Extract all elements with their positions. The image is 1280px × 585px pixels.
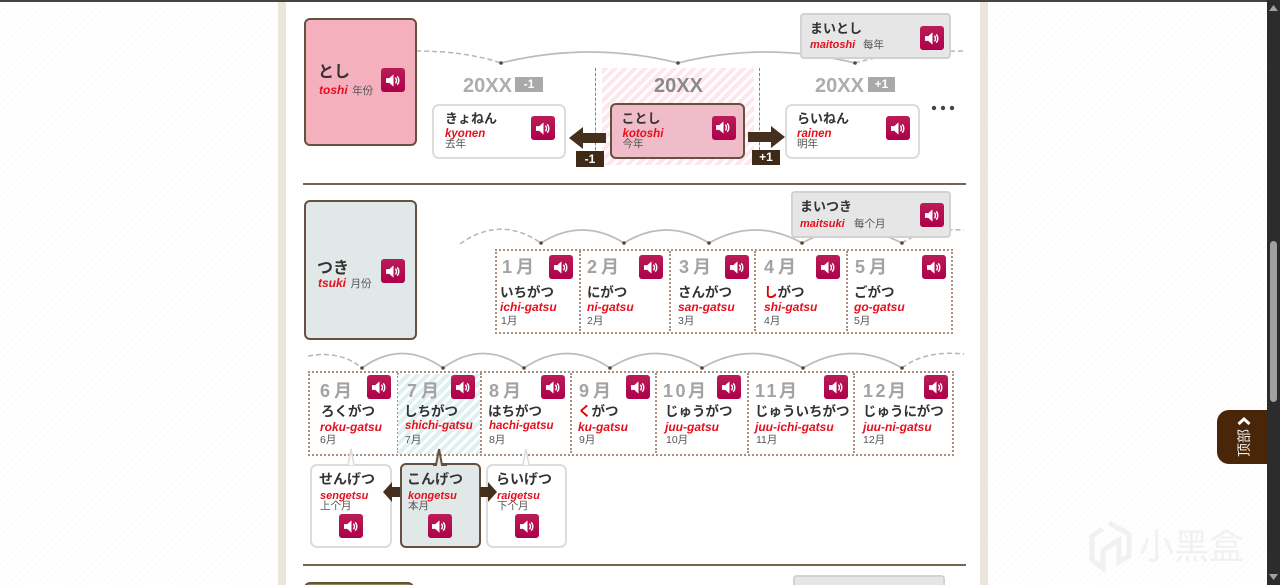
card: kongetsu with pointer: 本月 <box>408 500 429 512</box>
pointer: kongetsu to July <box>433 448 447 466</box>
month: October: じゅうがつ <box>665 404 732 419</box>
card: sengetsu with pointer: せんげつ <box>319 471 375 487</box>
icon: speaker <box>381 259 405 283</box>
month: May: 5月 <box>854 315 870 327</box>
scrollbar thumb <box>1270 241 1277 402</box>
month: February <box>587 255 663 327</box>
month: November <box>754 375 850 446</box>
month: October: juu-gatsu <box>665 420 719 434</box>
callout: maitsuki: 每个月 <box>854 218 886 230</box>
card: rainen: rainen <box>797 128 832 140</box>
connector curves: year and month timelines <box>308 50 964 370</box>
month: September <box>578 375 650 446</box>
card: rainen: 明年 <box>797 138 818 150</box>
card: sengetsu with pointer: 上个月 <box>320 500 352 512</box>
month: December: juu-ni-gatsu <box>863 420 932 434</box>
month: April <box>764 255 840 327</box>
tsuki romaji and meaning: tsuki 月份 <box>318 276 371 290</box>
month: January <box>500 255 573 327</box>
month: July, current highlight: しちがつ <box>404 404 458 419</box>
month: March: san-gatsu <box>678 300 735 314</box>
month: February: ni-gatsu <box>587 300 634 314</box>
pointer: sengetsu to June <box>348 448 354 465</box>
month: January: ichi-gatsu <box>500 300 557 314</box>
card: kongetsu with pointer: こんげつ <box>407 471 463 487</box>
month: November: じゅういちがつ <box>755 404 850 419</box>
month: April: しがつ <box>764 285 804 300</box>
month: May: ごがつ <box>854 285 894 300</box>
month grid: January to May <box>495 249 953 334</box>
month: May: go-gatsu <box>854 300 905 314</box>
minus one tag <box>515 77 543 92</box>
month: December: 12月 <box>863 434 885 446</box>
month: July, current highlight: 7月 <box>405 434 421 446</box>
card: raigetsu with pointer: らいげつ <box>496 471 552 487</box>
month: September: くがつ <box>578 404 618 419</box>
callout: maitsuki: まいつき <box>800 199 852 214</box>
month: June: roku-gatsu <box>320 420 382 434</box>
card: kyonen: きょねん <box>445 111 497 126</box>
icon: watermark logo <box>1090 521 1132 572</box>
month: May <box>854 255 946 327</box>
callout: maitsuki: maitsuki <box>800 218 845 230</box>
tag: minus one: -1 <box>585 152 595 166</box>
card: sengetsu with pointer <box>310 464 392 548</box>
arrow: to last year <box>569 127 606 149</box>
toshi romaji and meaning: toshi 年份 <box>319 83 373 97</box>
back to top label: 顶部 <box>1234 429 1254 457</box>
this-year striped highlight <box>595 68 760 165</box>
scroll down arrow <box>1269 574 1278 580</box>
month: September: ku-gatsu <box>578 420 628 434</box>
next section card top edge <box>304 582 414 585</box>
pointer: raigetsu to August <box>522 448 530 465</box>
watermark <box>1090 519 1244 572</box>
card: kyonen <box>432 104 566 159</box>
toshi heading: とし <box>318 64 350 81</box>
month: September: 9月 <box>579 434 595 446</box>
card: raigetsu with pointer: 下个月 <box>497 500 528 512</box>
card: rainen <box>785 104 920 159</box>
month: July, current highlight: 7月 <box>407 381 443 401</box>
card: kongetsu with pointer <box>400 463 481 548</box>
month: March: 3月 <box>679 257 715 277</box>
month: September: 9月 <box>579 381 615 401</box>
page column frame <box>278 2 988 585</box>
month: August: 8月 <box>489 434 505 446</box>
month: August: hachi-gatsu <box>489 420 554 432</box>
month: July, current highlight <box>398 374 480 454</box>
card: kotoshi: 今年 <box>622 138 644 150</box>
year labels: previous year: 20XX <box>463 75 512 97</box>
panel: toshi year card <box>304 18 417 146</box>
month: January: 1月 <box>502 257 538 277</box>
card: kyonen: 去年 <box>445 138 466 150</box>
month: August <box>488 375 565 446</box>
divider <box>303 564 966 566</box>
month: October: 10月 <box>666 434 688 446</box>
plus one tag: +1 <box>875 77 888 91</box>
month: January: 1月 <box>501 315 517 327</box>
card: kotoshi <box>610 103 745 159</box>
month: June: 6月 <box>320 381 356 401</box>
month: December <box>862 375 948 446</box>
arrow: to next month <box>480 482 497 502</box>
scroll up arrow <box>1269 5 1278 11</box>
month: November: 11月 <box>756 434 777 446</box>
card: rainen: らいねん <box>797 111 849 126</box>
month: February: 2月 <box>587 257 623 277</box>
month: February: にがつ <box>587 285 627 300</box>
arrow: to next year <box>748 126 785 148</box>
callout: maitsuki <box>791 191 951 238</box>
tag: plus one: +1 <box>759 150 773 164</box>
month: April: shi-gatsu <box>764 300 817 314</box>
callout: maitoshi: maitoshi <box>810 39 855 51</box>
month: June: 6月 <box>320 434 336 446</box>
year label: this year: 20XX <box>654 75 703 97</box>
callout: maitoshi: 每年 <box>863 39 884 51</box>
back to top tab <box>1217 410 1267 464</box>
month: August: はちがつ <box>488 404 542 419</box>
card: kotoshi: kotoshi <box>622 128 663 140</box>
top browser edge <box>0 0 1267 2</box>
month: March: 3月 <box>678 315 694 327</box>
month: February: 2月 <box>587 315 603 327</box>
month: March: さんがつ <box>678 285 732 300</box>
card: raigetsu with pointer <box>486 464 567 548</box>
tag: minus one <box>576 151 604 167</box>
month: June <box>320 375 391 446</box>
month: January: いちがつ <box>500 285 554 300</box>
month: December: 12月 <box>863 381 909 401</box>
month: October <box>663 375 741 446</box>
month: December: じゅうにがつ <box>863 404 944 419</box>
month grid: June to December <box>308 371 954 456</box>
scrollbar <box>1267 0 1280 585</box>
year labels: next year: 20XX <box>815 75 864 97</box>
continuation dots <box>932 106 954 110</box>
month: August: 8月 <box>489 381 525 401</box>
month: April: 4月 <box>764 315 780 327</box>
month: November: juu-ichi-gatsu <box>755 420 834 434</box>
month: June: ろくがつ <box>321 404 375 419</box>
card: kotoshi: ことし <box>622 111 661 126</box>
card: raigetsu with pointer: raigetsu <box>497 490 540 502</box>
arrow: to last month <box>383 482 400 502</box>
month: May: 5月 <box>855 257 891 277</box>
month: November: 11月 <box>755 381 800 401</box>
minus one tag: -1 <box>524 77 534 91</box>
month: July, current highlight: shichi-gatsu <box>405 420 473 432</box>
year labels: previous year <box>463 75 543 97</box>
card: kyonen: kyonen <box>445 128 485 140</box>
plus one tag <box>868 77 895 92</box>
tag: plus one <box>752 150 780 165</box>
icon: chevron up <box>1238 417 1250 426</box>
month: March <box>678 255 749 327</box>
icon: speaker <box>381 68 405 92</box>
next section callout top edge <box>793 575 945 585</box>
tsuki heading: つき <box>317 260 349 277</box>
callout: maitoshi <box>800 13 951 59</box>
month: April: 4月 <box>764 257 800 277</box>
month: October: 10月 <box>663 381 709 401</box>
panel: tsuki month card <box>304 200 417 340</box>
year labels: next year <box>815 75 895 97</box>
card: sengetsu with pointer: sengetsu <box>320 490 368 502</box>
callout: maitoshi: まいとし <box>810 21 862 36</box>
watermark text: 小黑盒 <box>1139 519 1244 570</box>
card: kongetsu with pointer: kongetsu <box>408 490 457 502</box>
divider <box>303 183 966 185</box>
